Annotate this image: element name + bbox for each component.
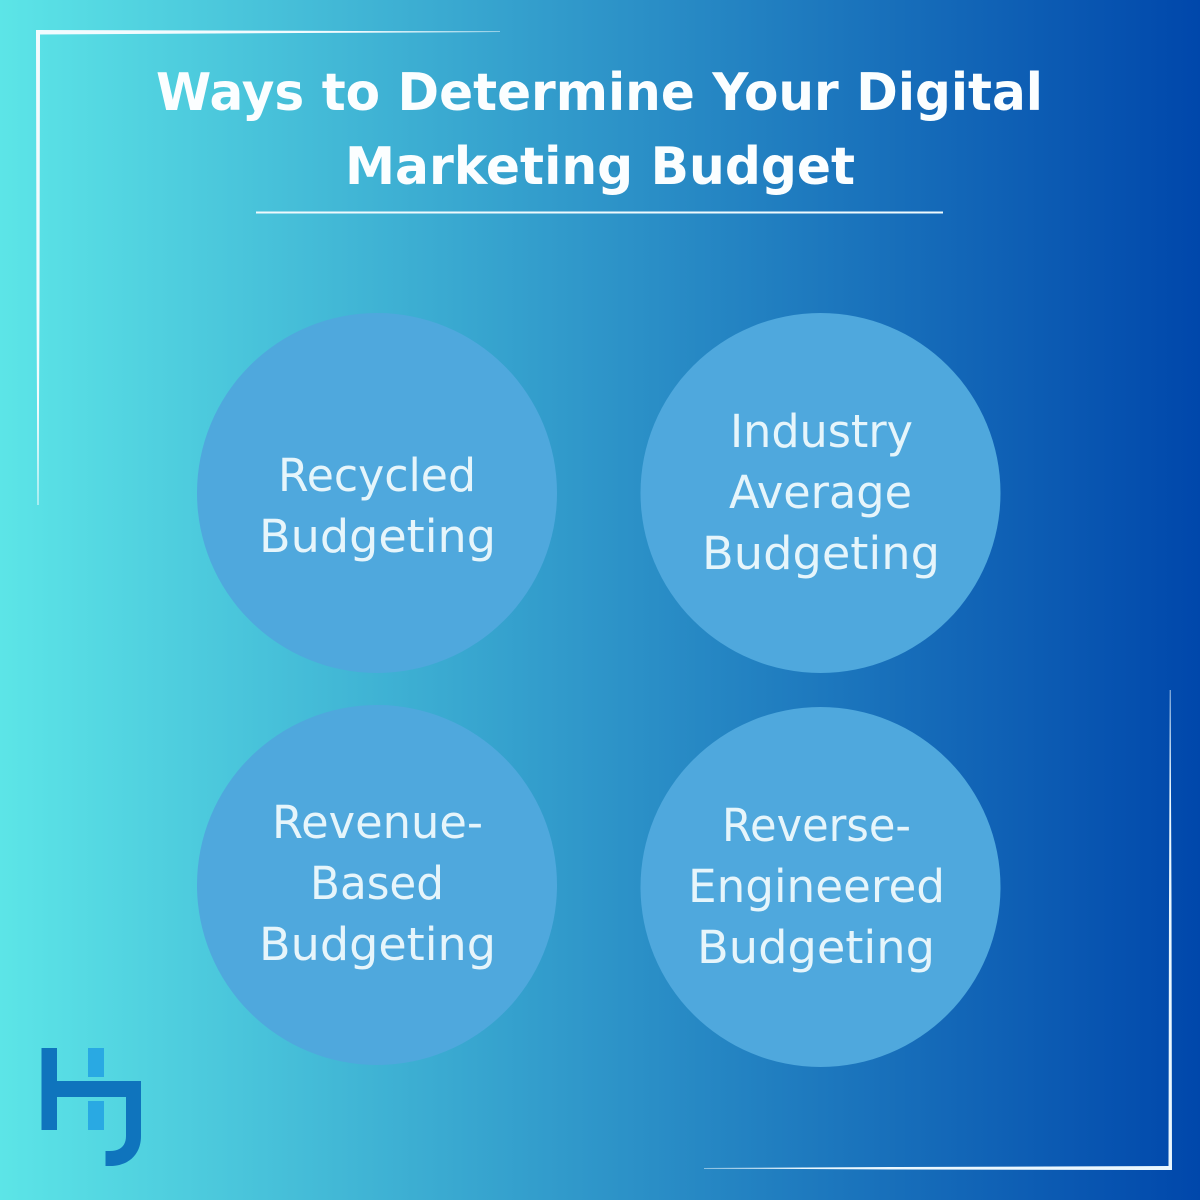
title [156, 63, 1043, 197]
title: Ways to Determine Your Digital [156, 63, 1043, 123]
panel: Industry Average Budgeting: Industry [730, 405, 913, 458]
panel: Recycled Budgeting: Recycled [278, 449, 476, 502]
panel: Industry Average Budgeting: Budgeting [702, 527, 940, 580]
panel: Recycled Budgeting [197, 313, 557, 673]
panel: Reverse-Engineered Budgeting: Budgeting [697, 921, 935, 974]
panel: Recycled Budgeting: Budgeting [259, 510, 496, 563]
panel: Reverse-Engineered Budgeting: Engineered [688, 860, 945, 913]
bottom-right tapered frame [704, 690, 1172, 1170]
panel: Revenue-Based Budgeting [197, 705, 557, 1065]
panel: Reverse-Engineered Budgeting: Reverse- [722, 799, 911, 852]
panel: Revenue-Based Budgeting: Budgeting [259, 918, 496, 971]
title: Marketing Budget [345, 137, 855, 197]
panel: Revenue-Based Budgeting: Based [310, 857, 444, 910]
title underline [256, 212, 943, 214]
icon: HJ logo [42, 1048, 141, 1166]
panel: Reverse-Engineered Budgeting [640, 707, 1000, 1067]
top-left tapered frame [36, 30, 500, 505]
panel: Industry Average Budgeting: Average [729, 466, 912, 519]
panel: Revenue-Based Budgeting: Revenue- [272, 796, 483, 849]
panel: Industry Average Budgeting [640, 313, 1000, 673]
